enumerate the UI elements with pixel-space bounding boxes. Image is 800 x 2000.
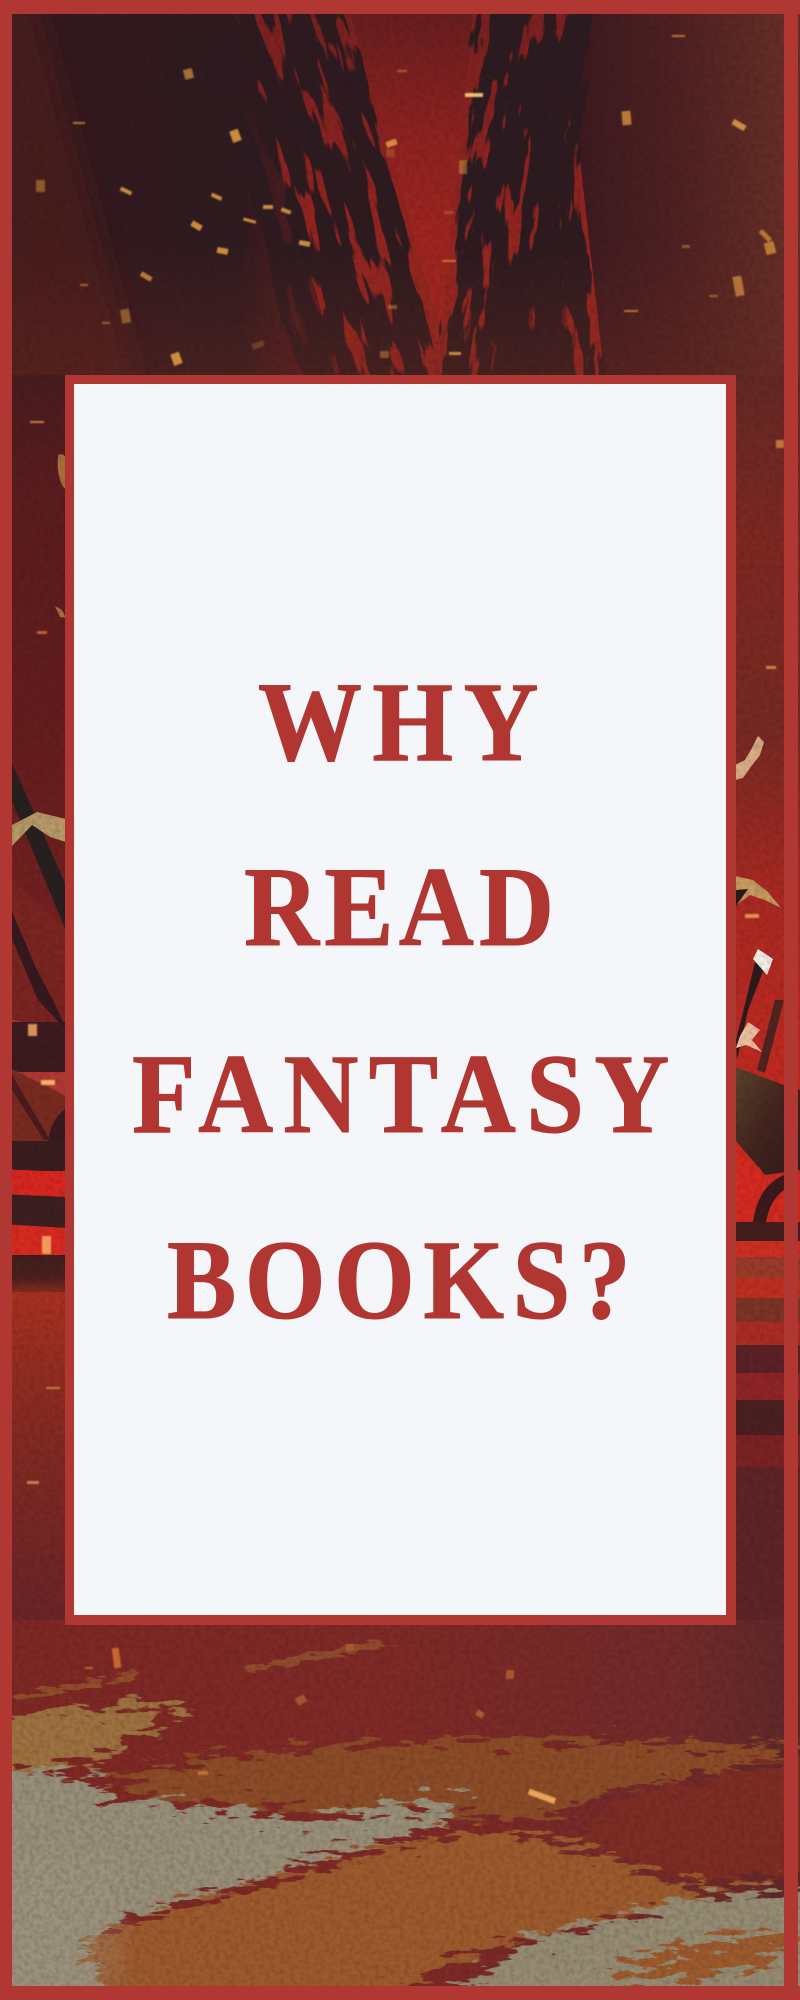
- title: BOOKS?: [167, 1218, 631, 1343]
- title panel: [65, 375, 736, 1625]
- panel border: [65, 375, 736, 1625]
- left strip: painted scene: [0, 375, 66, 1632]
- wash: middle brown band: [92, 1738, 800, 1822]
- wash: lower orange ground: [70, 1830, 800, 2000]
- title: READ: [244, 845, 554, 970]
- wash: big grey ground: [0, 1770, 490, 2000]
- title: [132, 660, 669, 1343]
- title: FANTASY: [132, 1032, 669, 1157]
- wash: upper-left tan patch: [0, 1696, 225, 1785]
- thin speckled tide lines: [12, 1635, 400, 1703]
- panel fill: [74, 384, 726, 1615]
- wash: orange blots on grey: [570, 1925, 800, 1990]
- wash: lower-right grey ground: [398, 1885, 800, 2000]
- bottom scene: tan ground washed with rust: [0, 1620, 800, 2000]
- title: WHY: [258, 660, 539, 785]
- wash: dark rust lump: [561, 1750, 800, 1885]
- top scene: dark canyon with red wedge: [0, 0, 800, 420]
- right strip: painted scene: [735, 375, 800, 1632]
